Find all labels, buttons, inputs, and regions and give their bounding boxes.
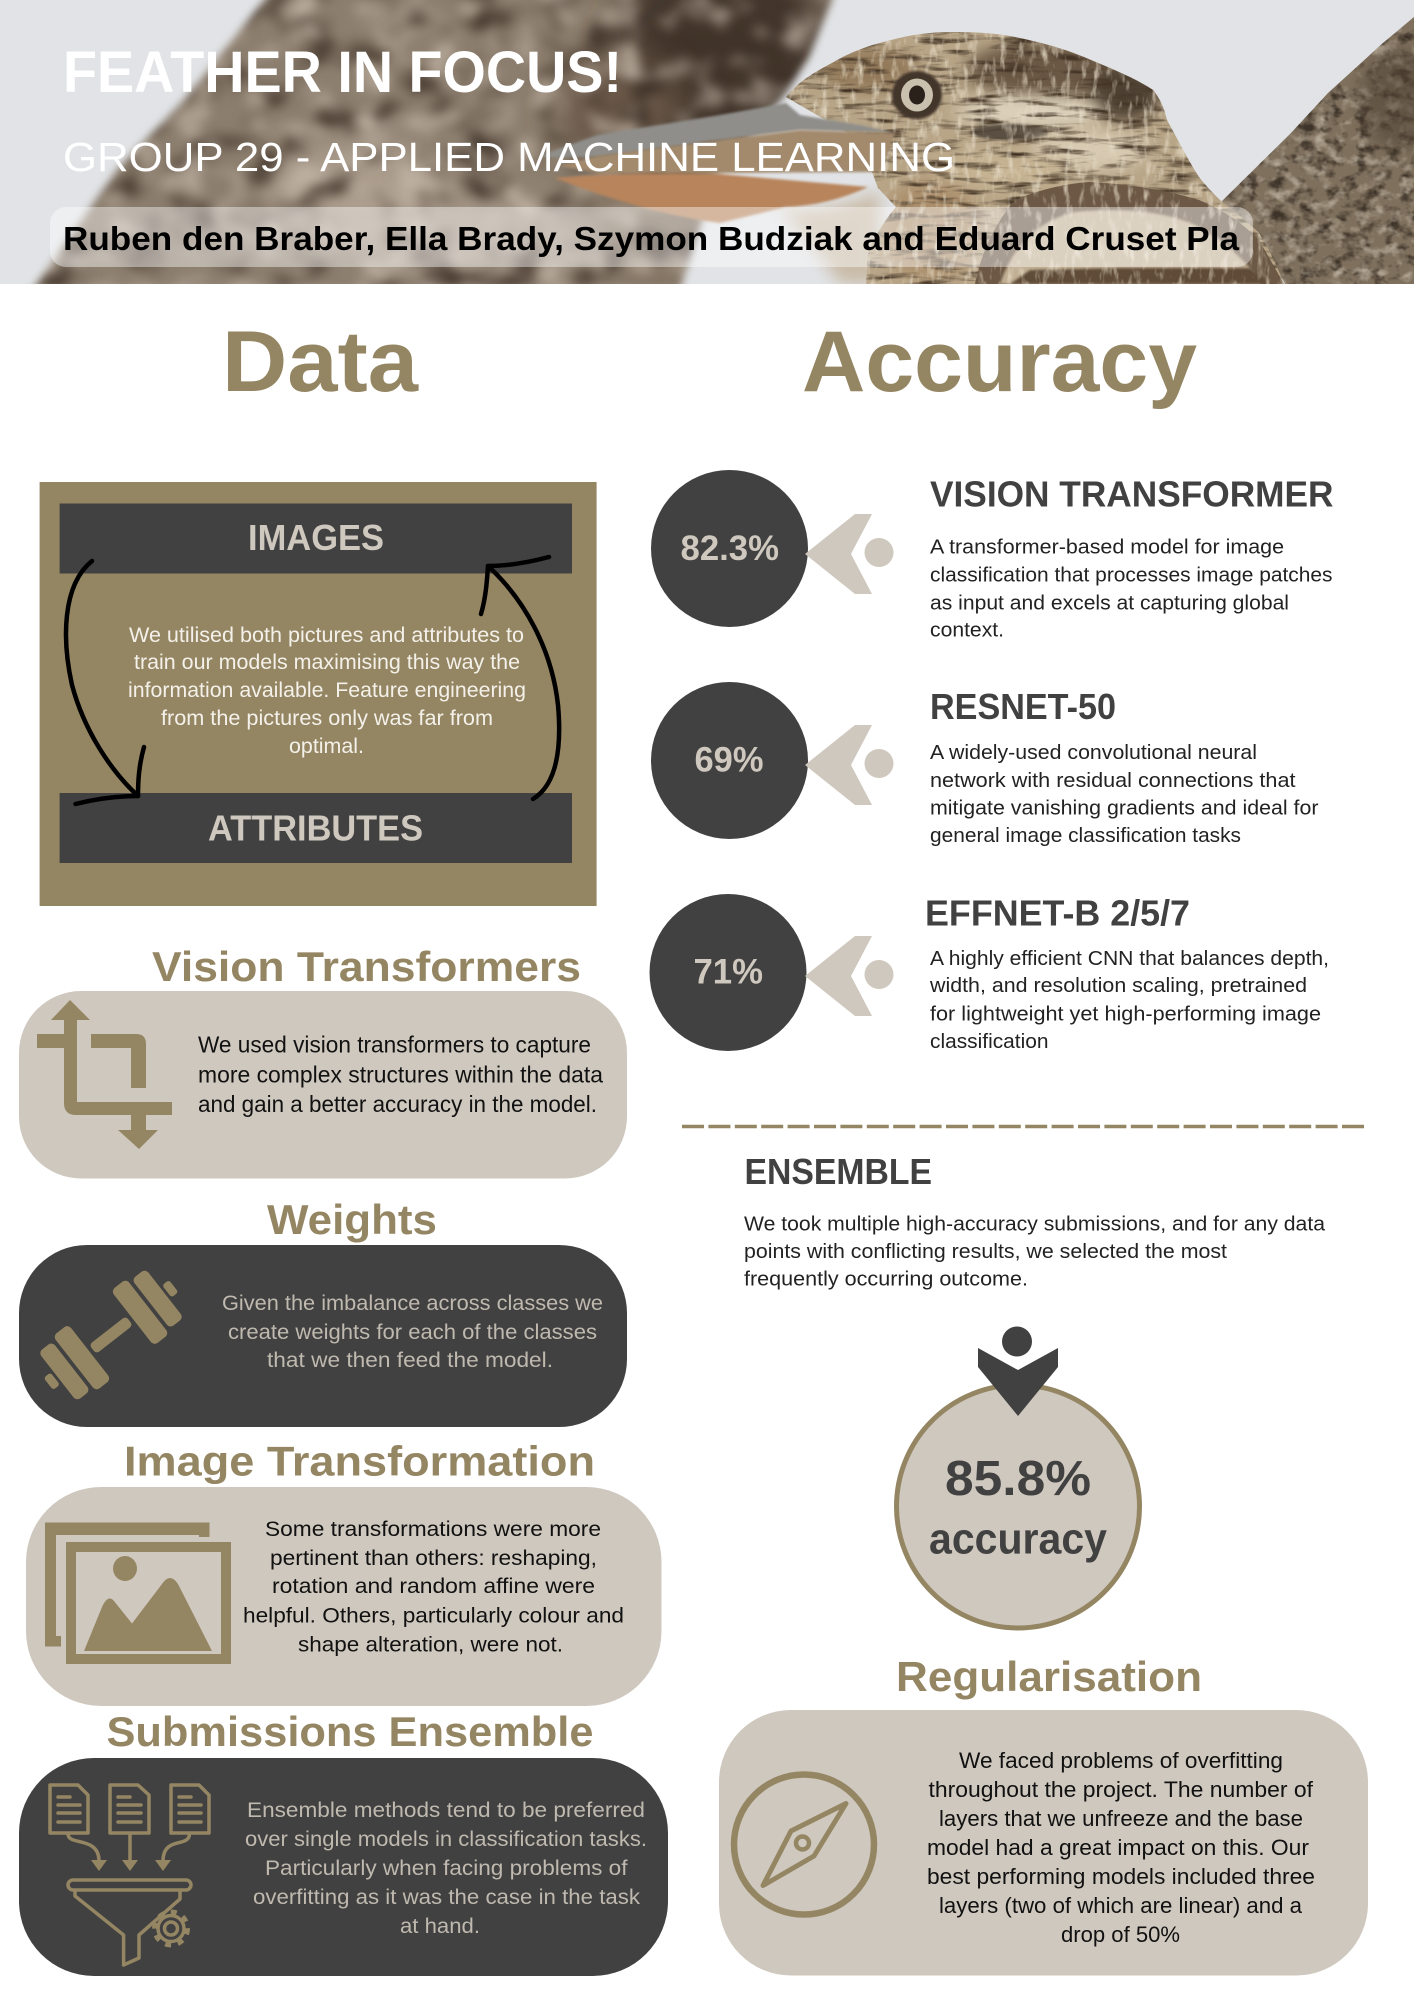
vision text: We used vision transformers to capture xyxy=(198,1032,591,1058)
wing xyxy=(975,182,1284,284)
score circle 82.3% xyxy=(651,470,808,627)
eye xyxy=(892,71,942,119)
bird xyxy=(537,20,1300,290)
arrow: images to attributes xyxy=(66,561,144,804)
transformation text: shape alteration, were not. xyxy=(298,1632,563,1656)
arrow: attributes to images xyxy=(481,557,559,799)
header banner photo xyxy=(0,0,1414,290)
pointer icon xyxy=(978,1326,1058,1416)
model row: resnet-50 xyxy=(651,682,1319,847)
ensemble methods text: overfitting as it was the case in the task xyxy=(253,1885,640,1909)
model description: A highly efficient CNN that balances depth, xyxy=(930,947,1329,970)
lower beak xyxy=(555,174,868,223)
regularisation text: We faced problems of overfitting xyxy=(959,1748,1283,1773)
regularisation text: layers (two of which are linear) and a xyxy=(939,1893,1303,1918)
weights text: Given the imbalance across classes we xyxy=(222,1291,603,1315)
model description: network with residual connections that xyxy=(930,769,1296,792)
panel: regularisation xyxy=(719,1710,1368,1976)
transformation text: rotation and random affine were xyxy=(272,1574,595,1598)
pointer icon xyxy=(805,514,894,594)
model row: effnet-b xyxy=(650,892,1329,1053)
names pill background xyxy=(50,207,1253,267)
ensemble methods text: Particularly when facing problems of xyxy=(265,1856,628,1880)
weights text: create weights for each of the classes xyxy=(228,1320,597,1344)
data description: We utilised both pictures and attributes to xyxy=(129,623,524,647)
ensemble description: points with conflicting results, we selected the most xyxy=(744,1240,1227,1263)
model description xyxy=(930,741,1319,847)
data description xyxy=(128,623,526,758)
model title: VISION TRANSFORMER xyxy=(930,474,1334,514)
panel: images and attributes xyxy=(40,482,597,906)
upper beak xyxy=(537,103,895,157)
icon: pictures xyxy=(45,1522,231,1664)
ensemble description: frequently occurring outcome. xyxy=(744,1268,1028,1290)
ensemble description: We took multiple high-accuracy submissions, and for any data xyxy=(744,1212,1326,1236)
subtitle: GROUP 29 - APPLIED MACHINE LEARNING xyxy=(63,134,955,180)
model description: A transformer-based model for image xyxy=(930,536,1284,558)
panel: weights xyxy=(19,1245,627,1427)
faint throat feathers xyxy=(780,190,880,284)
accuracy label: accuracy xyxy=(929,1514,1107,1564)
model description: width, and resolution scaling, pretrained xyxy=(929,974,1307,997)
model description: general image classification tasks xyxy=(930,824,1241,847)
accuracy badge xyxy=(896,1326,1140,1628)
images bar xyxy=(60,504,572,574)
panel: submissions ensemble xyxy=(19,1758,668,1976)
model description: context. xyxy=(930,618,1004,642)
pointer icon xyxy=(805,725,894,805)
images bar: IMAGES xyxy=(248,517,384,558)
heading: Weights: Weights xyxy=(267,1196,437,1243)
data description: train our models maximising this way the xyxy=(134,650,520,674)
regularisation text: drop of 50% xyxy=(1061,1922,1180,1947)
icon: compass xyxy=(734,1774,874,1914)
heading: Regularisation: Regularisation xyxy=(896,1653,1202,1700)
authors: Ruben den Braber, Ella Brady, Szymon Budziak and Eduard Cruset Pla xyxy=(63,220,1240,257)
heading: Submissions Ensemble: Submissions Ensemble xyxy=(106,1708,594,1755)
attributes bar xyxy=(60,793,572,863)
heading: Image Transformation: Image Transformation xyxy=(124,1438,595,1484)
regularisation text xyxy=(927,1748,1315,1947)
data description: optimal. xyxy=(289,734,364,758)
heading: Accuracy: Accuracy xyxy=(802,314,1197,410)
vision text: and gain a better accuracy in the model. xyxy=(198,1091,597,1117)
icon: documents into funnel xyxy=(50,1785,209,1965)
vision text: more complex structures within the data xyxy=(198,1062,603,1088)
icon: crop xyxy=(37,1000,172,1149)
head and neck feathers xyxy=(786,32,1284,284)
heading: Data: Data xyxy=(222,314,419,410)
regularisation text: throughout the project. The number of xyxy=(928,1777,1314,1802)
ensemble description xyxy=(744,1212,1326,1290)
ensemble methods text xyxy=(245,1798,647,1938)
model row: vision transformer xyxy=(651,470,1334,642)
ensemble methods text: at hand. xyxy=(400,1914,480,1938)
model description: classification xyxy=(930,1030,1048,1053)
score circle 71%: 71% xyxy=(694,952,763,992)
right tree trunk xyxy=(1222,17,1414,284)
transformation text: helpful. Others, particularly colour and xyxy=(243,1604,624,1628)
transformation text xyxy=(243,1517,624,1656)
regularisation text: layers that we unfreeze and the base xyxy=(939,1806,1303,1831)
regularisation text: best performing models included three xyxy=(927,1864,1315,1889)
title: FEATHER IN FOCUS! xyxy=(63,40,622,105)
data description: from the pictures only was far from xyxy=(161,706,493,730)
vision text xyxy=(198,1032,603,1117)
blurred tree trunk xyxy=(30,0,838,284)
pointer icon xyxy=(805,936,894,1016)
model title: EFFNET-B 2/5/7 xyxy=(925,892,1190,934)
panel: image transformation xyxy=(26,1487,662,1706)
score circle 69% xyxy=(651,682,808,839)
model description: for lightweight yet high-performing image xyxy=(930,1002,1321,1026)
data description: information available. Feature engineering xyxy=(128,678,526,702)
heading: Vision Transformers: Vision Transformers xyxy=(152,943,581,990)
model description: classification that processes image patches xyxy=(930,564,1332,586)
icon: dumbbell xyxy=(27,1259,195,1411)
model description xyxy=(930,536,1332,642)
model title: RESNET-50 xyxy=(930,686,1116,727)
score circle 69%: 69% xyxy=(694,740,764,780)
score circle 82.3%: 82.3% xyxy=(680,529,779,568)
ensemble methods text: over single models in classification tasks. xyxy=(245,1827,647,1851)
weights text xyxy=(222,1291,603,1372)
transformation text: Some transformations were more xyxy=(265,1517,601,1541)
accuracy value: 85.8% xyxy=(945,1452,1091,1506)
model description: as input and excels at capturing global xyxy=(930,592,1289,614)
transformation text: pertinent than others: reshaping, xyxy=(270,1546,597,1570)
weights text: that we then feed the model. xyxy=(267,1348,553,1372)
beak middle band xyxy=(560,130,895,173)
attributes bar: ATTRIBUTES xyxy=(208,808,423,848)
model description xyxy=(929,947,1329,1053)
model description: A widely-used convolutional neural xyxy=(930,741,1257,764)
panel: vision transformers xyxy=(19,991,627,1178)
model description: mitigate vanishing gradients and ideal for xyxy=(930,796,1319,820)
heading: ensemble: ENSEMBLE xyxy=(744,1151,932,1192)
ensemble methods text: Ensemble methods tend to be preferred xyxy=(247,1798,645,1822)
score circle 71% xyxy=(650,894,806,1051)
regularisation text: model had a great impact on this. Our xyxy=(927,1835,1309,1860)
